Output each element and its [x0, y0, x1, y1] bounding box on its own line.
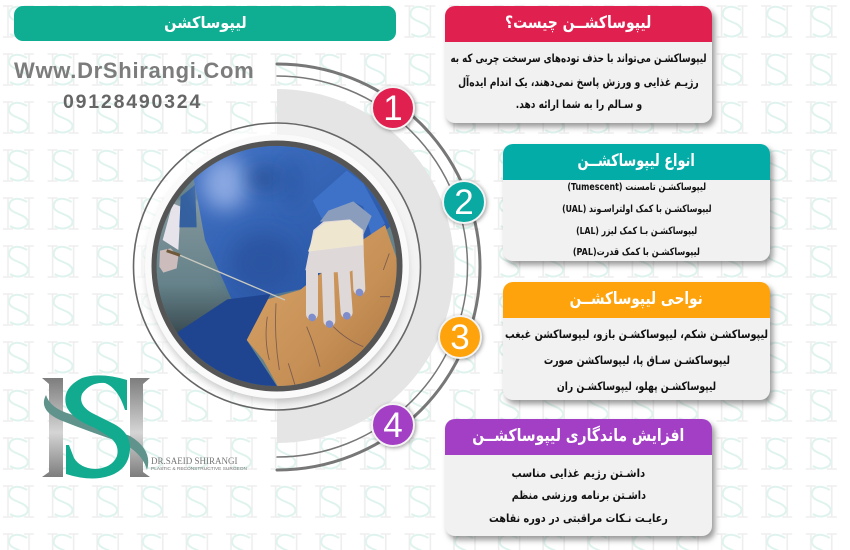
glove hand	[305, 219, 364, 324]
number badge 3	[438, 315, 482, 359]
list of areas: لیپوساکشـن سـاق پا، لیپوساکشن صورت	[543, 353, 730, 367]
number badge 2	[442, 180, 486, 224]
description text: و سـالم را به شما ارائه دهد.	[515, 97, 642, 111]
number badge 2: 2	[454, 183, 474, 222]
heading: لیپوساکشــن چیست؟	[505, 13, 652, 33]
heading	[445, 419, 712, 455]
logo name text: DR.SAEID SHIRANGI	[151, 456, 238, 466]
list of types	[562, 182, 711, 258]
description text: لیپوساکشـن می‌تواند با حذف توده‌های سرسخت چربی که به	[450, 51, 707, 65]
list of areas: لیپوساکشـن شکم، لیپوساکشـن بازو، لیپوساکشن غبغب	[505, 327, 768, 341]
heading: انواع لیپوساکشــن	[578, 151, 695, 171]
number badge 4: 4	[383, 406, 403, 445]
surgical markings	[266, 253, 390, 385]
panel: increasing longevity	[445, 419, 712, 536]
list of areas: لیپوساکشـن پهلو، لیپوساکشـن ران	[557, 379, 716, 393]
panel: types of liposuction	[503, 144, 770, 261]
description text	[450, 51, 707, 111]
description text: رژیـم غذایی و ورزش پاسخ نمی‌دهند، یک اندام ایده‌آل	[458, 75, 699, 89]
list of tips: رعایـت نـکات مراقبتی در دوره نقاهت	[489, 511, 668, 525]
heading	[503, 144, 770, 180]
logo subtitle text: PLASTIC & RECONSTRUCTIVE SURGEON	[151, 467, 247, 472]
grey half disc behind photo	[277, 89, 454, 443]
website address: Www.DrShirangi.Com	[14, 58, 254, 83]
heading	[445, 6, 712, 42]
list of types: لیپوساکشـن بـا کمک لیزر (LAL)	[576, 226, 697, 237]
glove cuff	[320, 201, 372, 235]
list of tips: داشـتن رژیم غذایی مناسب	[512, 466, 645, 480]
heading	[503, 282, 770, 318]
list of types: لیپوساکشـن تامسنت (Tumescent)	[567, 182, 706, 193]
list of tips: داشـتن برنامه ورزشی منظم	[511, 488, 646, 502]
list of types: لیپوساکشـن با کمک اولتراسـوند (UAL)	[562, 204, 711, 215]
heading: نواحی لیپوساکشــن	[570, 289, 703, 309]
central photo frame	[134, 123, 420, 410]
phone number: 09128490324	[63, 91, 202, 113]
number badge 3: 3	[450, 318, 470, 357]
number badge 1	[371, 86, 415, 130]
panel: what is liposuction	[445, 6, 712, 123]
blue fabric	[178, 294, 277, 386]
surgery photo	[156, 146, 397, 386]
heading: افزایش ماندگاری لیپوساکشــن	[473, 426, 684, 446]
list of types: لیپوساکشـن با کمک قدرت(PAL)	[573, 247, 700, 258]
left hand and cannula	[159, 248, 178, 273]
list of tips	[489, 466, 668, 525]
number badge 4	[371, 403, 415, 447]
curved arcs	[277, 64, 480, 470]
list of areas	[505, 327, 768, 393]
logo	[42, 375, 247, 478]
thigh	[247, 225, 398, 393]
top title bar: لیپوساکشن	[164, 13, 246, 32]
number badge 1: 1	[383, 89, 403, 128]
panel: liposuction areas	[503, 282, 770, 400]
top title bar	[14, 6, 396, 41]
